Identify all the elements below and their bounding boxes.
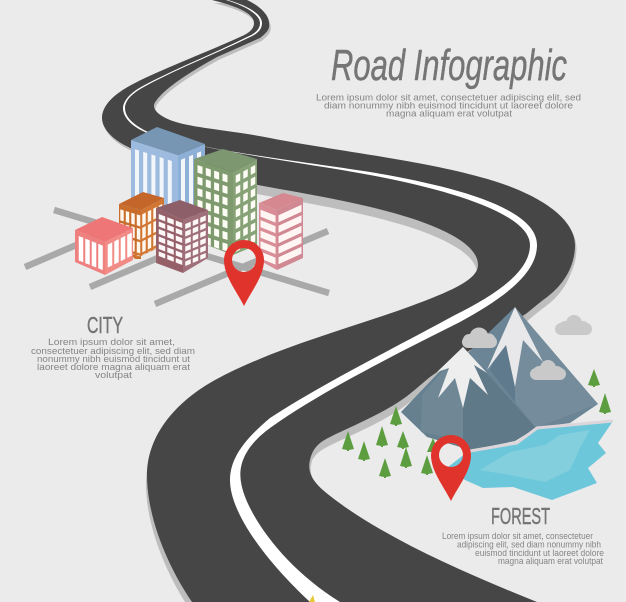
forest heading: FOREST xyxy=(491,503,550,529)
city text: volutpat xyxy=(95,369,132,380)
city text: nonummy nibh euismod tincidunt ut xyxy=(37,353,190,364)
building: maroon block xyxy=(156,200,208,273)
small mountain snow xyxy=(437,347,488,408)
city map xyxy=(25,127,329,306)
building: green tower xyxy=(194,149,257,255)
trees xyxy=(342,369,611,478)
icon: forest map pin xyxy=(431,435,471,501)
star marker xyxy=(309,595,315,602)
forest scene xyxy=(342,307,613,501)
intro text xyxy=(316,92,581,118)
small mountain xyxy=(401,347,536,450)
forest text xyxy=(442,530,604,566)
big mountain snow xyxy=(487,307,543,387)
shoreline xyxy=(470,421,613,451)
streets xyxy=(25,210,329,304)
building: orange block xyxy=(119,192,164,259)
road surface xyxy=(102,0,575,602)
city text: Lorem ipsum dolor sit amet, xyxy=(48,336,175,347)
city text: laoreet dolore magna aliquam erat xyxy=(37,361,190,372)
lake xyxy=(448,421,613,500)
building: blue tower xyxy=(131,127,205,222)
intro text: Lorem ipsum dolor sit amet, consectetuer adipiscing elit, sed xyxy=(316,92,581,102)
building: rose block xyxy=(259,193,303,270)
forest text: euismod tincidunt ut laoreet dolore xyxy=(475,547,604,558)
road xyxy=(101,0,576,602)
intro text: magna aliquam erat volutpat xyxy=(386,108,512,118)
city text xyxy=(31,336,195,380)
intro text: diam nonummy nibh euismod tincidunt ut laoreet dolore xyxy=(324,100,573,110)
building: pink block xyxy=(75,217,133,275)
icon: city map pin xyxy=(224,240,264,306)
big mountain xyxy=(440,307,598,450)
forest text: magna aliquam erat volutpat xyxy=(498,555,603,566)
city heading: CITY xyxy=(87,312,123,338)
road centre line xyxy=(123,0,537,602)
city text: consectetuer adipiscing elit, sed diam xyxy=(31,345,195,356)
forest text: Lorem ipsum dolor sit amet, consectetuer xyxy=(442,530,593,541)
forest text: adipiscing elit, sed diam nonummy nibh xyxy=(457,538,601,550)
road shadow xyxy=(101,3,576,602)
clouds xyxy=(462,315,592,380)
